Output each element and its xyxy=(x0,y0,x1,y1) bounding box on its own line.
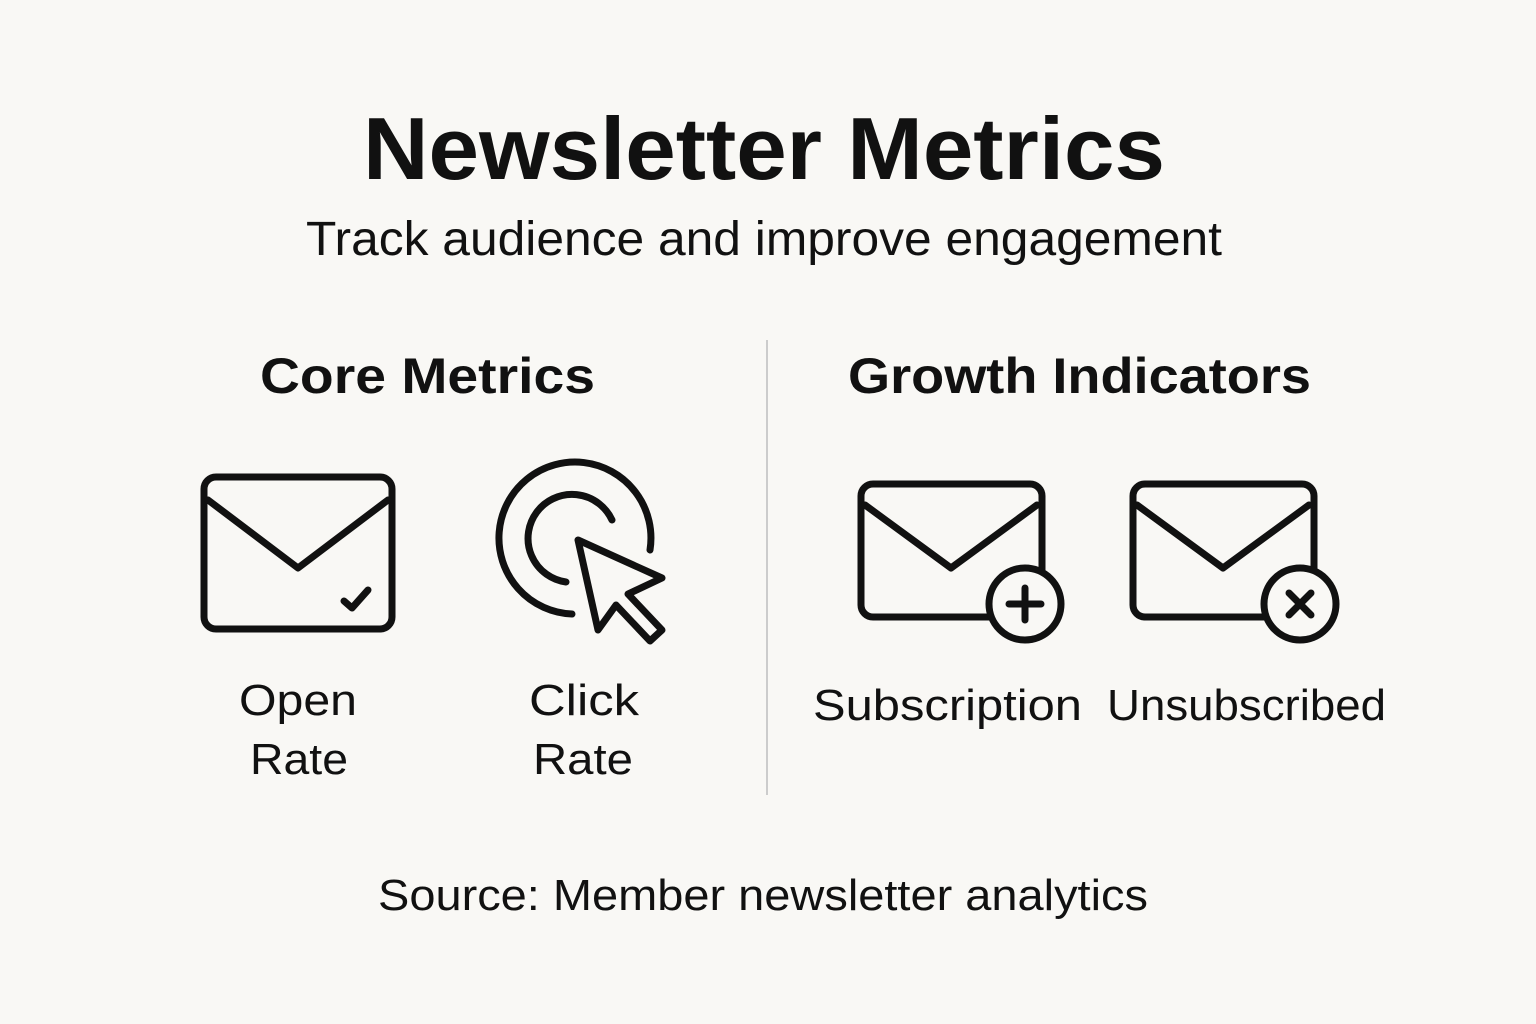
panel: core metrics: Rate xyxy=(533,735,633,784)
icon: envelope with check xyxy=(204,477,392,629)
label: open rate: Open xyxy=(239,676,357,725)
heading: core metrics: Core Metrics xyxy=(260,348,595,404)
title: Newsletter Metrics xyxy=(363,99,1165,198)
panel: core metrics: Rate xyxy=(250,735,348,784)
subtitle: Track audience and improve engagement xyxy=(306,213,1222,266)
label: unsubscribed: Unsubscribed xyxy=(1107,681,1386,730)
panel: growth indicators xyxy=(813,348,1386,730)
source note: Source: Member newsletter analytics xyxy=(378,871,1148,920)
heading: growth indicators: Growth Indicators xyxy=(848,348,1311,404)
icon: click cursor xyxy=(499,462,662,641)
panel: core metrics xyxy=(204,348,662,784)
label: subscription: Subscription xyxy=(813,681,1082,730)
icon: envelope with plus xyxy=(861,484,1061,640)
label: click rate: Click xyxy=(529,676,640,725)
icon: envelope with x xyxy=(1133,484,1336,640)
